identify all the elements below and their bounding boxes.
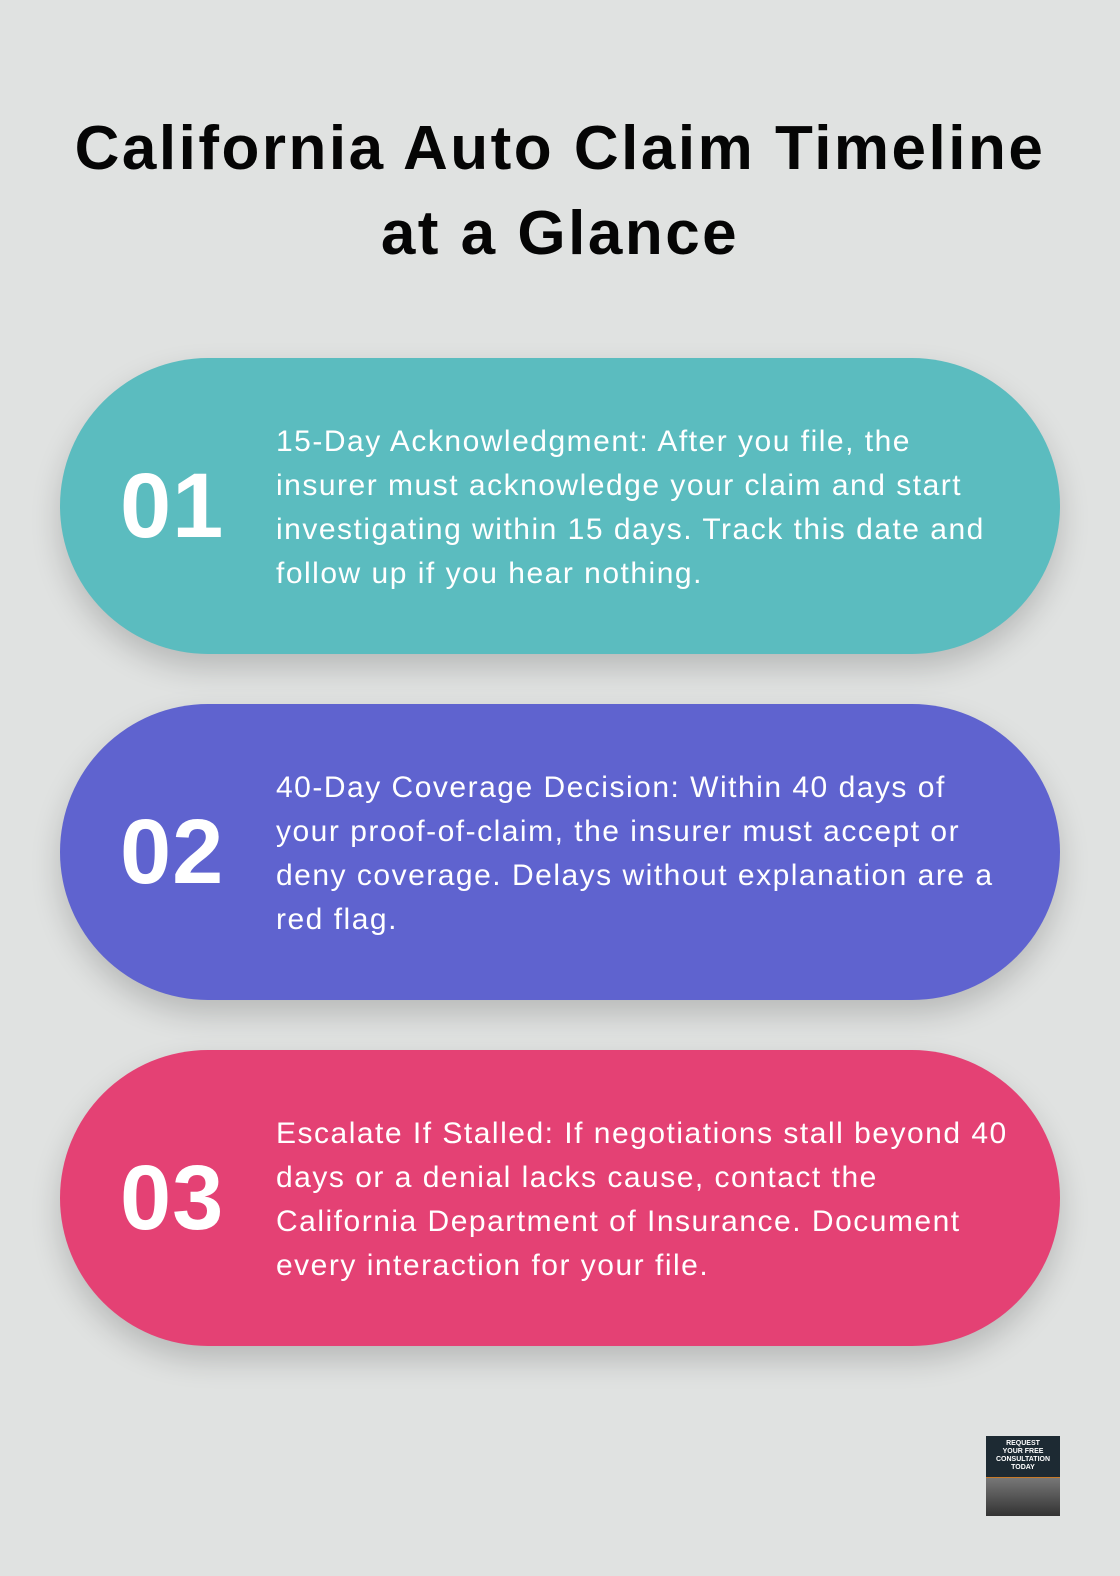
panel: step 02 (60, 704, 1060, 1000)
text 03 (276, 1117, 1008, 1282)
logo: consultation badge: CONSULTATION (996, 1456, 1050, 1463)
text 02: your proof-of-claim, the insurer must accept or (276, 815, 960, 848)
logo: consultation badge: REQUEST (1006, 1440, 1040, 1447)
logo: consultation badge: YOUR FREE (1003, 1448, 1043, 1455)
text 01: investigating within 15 days. Track this date and (276, 513, 985, 546)
panel: step 03 (60, 1050, 1060, 1346)
text 02 (276, 771, 994, 936)
title: at a Glance (381, 199, 739, 268)
text 03: California Department of Insurance. Document (276, 1205, 961, 1238)
title (75, 114, 1045, 268)
text 01: 15-Day Acknowledgment: After you file, the (276, 425, 911, 458)
text 02: 40-Day Coverage Decision: Within 40 days of (276, 771, 946, 804)
number 02: 02 (120, 801, 224, 903)
text 02: deny coverage. Delays without explanation are a (276, 859, 994, 892)
text 03: Escalate If Stalled: If negotiations stall beyond 40 (276, 1117, 1008, 1150)
title: California Auto Claim Timeline (75, 114, 1045, 183)
number 03: 03 (120, 1147, 224, 1249)
panel: step 01 (60, 358, 1060, 654)
text 01: follow up if you hear nothing. (276, 557, 703, 590)
text 03: days or a denial lacks cause, contact the (276, 1161, 878, 1194)
text 02: red flag. (276, 903, 398, 936)
logo: consultation badge (986, 1436, 1060, 1516)
number 01: 01 (120, 455, 224, 557)
logo: consultation badge: TODAY (1011, 1464, 1035, 1471)
text 01: insurer must acknowledge your claim and start (276, 469, 962, 502)
text 01 (276, 425, 985, 590)
text 03: every interaction for your file. (276, 1249, 709, 1282)
